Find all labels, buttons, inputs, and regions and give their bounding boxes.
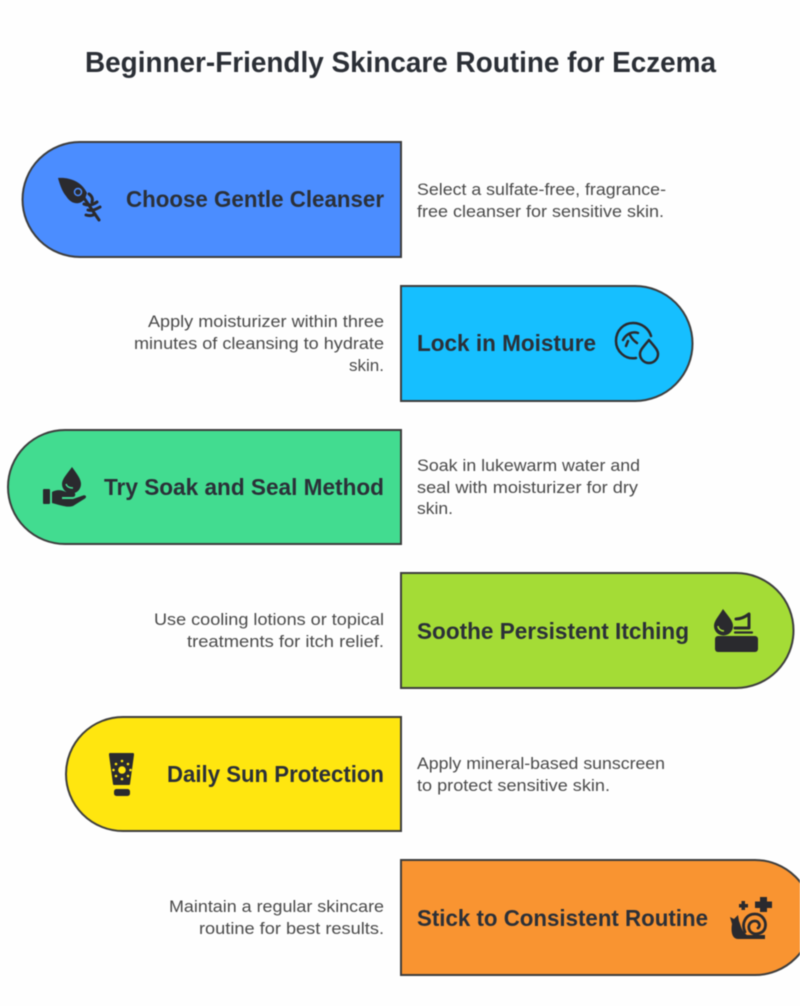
pill: yellow <box>66 717 401 831</box>
step 1: choose gentle cleanser <box>23 142 666 257</box>
pill: orange <box>401 860 800 975</box>
pill: blue <box>23 142 401 257</box>
description: Apply moisturizer within three <box>148 312 384 331</box>
pill: lime <box>401 573 793 688</box>
description <box>417 180 666 221</box>
icon: snail with sparkles <box>730 897 772 939</box>
step 6: stick to consistent routine <box>169 860 800 975</box>
step 3: try soak and seal method <box>8 430 640 544</box>
description <box>169 897 384 938</box>
label: Lock in Moisture <box>417 330 596 356</box>
description: minutes of cleansing to hydrate <box>134 334 384 353</box>
icon: sunscreen tube <box>109 753 134 796</box>
pill: cyan <box>401 286 692 401</box>
icon: feather <box>58 178 100 220</box>
title: Beginner-Friendly Skincare Routine for Eczema <box>85 47 717 79</box>
description: free cleanser for sensitive skin. <box>417 202 664 221</box>
label: Stick to Consistent Routine <box>417 905 708 931</box>
pill: green <box>8 430 401 544</box>
icon: drop over hand <box>43 467 86 507</box>
description: Apply mineral-based sunscreen <box>417 754 665 773</box>
description: skin. <box>417 499 453 518</box>
label: Daily Sun Protection <box>167 761 384 787</box>
description: Soak in lukewarm water and <box>417 456 640 475</box>
description: Use cooling lotions or topical <box>154 610 384 629</box>
description: seal with moisturizer for dry <box>417 478 639 497</box>
icon: gauge and drop <box>616 323 658 363</box>
description: skin. <box>349 356 384 375</box>
label: Soothe Persistent Itching <box>417 618 689 644</box>
description: routine for best results. <box>199 919 384 938</box>
description <box>417 754 665 795</box>
description <box>134 312 384 375</box>
description: treatments for itch relief. <box>187 632 384 651</box>
description: to protect sensitive skin. <box>417 776 610 795</box>
step 5: daily sun protection <box>66 717 665 831</box>
icon: drop and tissue box <box>714 609 758 652</box>
label: Choose Gentle Cleanser <box>126 186 384 212</box>
description <box>417 456 640 518</box>
step 4: soothe persistent itching <box>154 573 793 688</box>
label: Try Soak and Seal Method <box>104 474 384 500</box>
step 2: lock in moisture <box>134 286 692 401</box>
description <box>154 610 384 651</box>
description: Maintain a regular skincare <box>169 897 384 916</box>
description: Select a sulfate-free, fragrance- <box>417 180 666 199</box>
